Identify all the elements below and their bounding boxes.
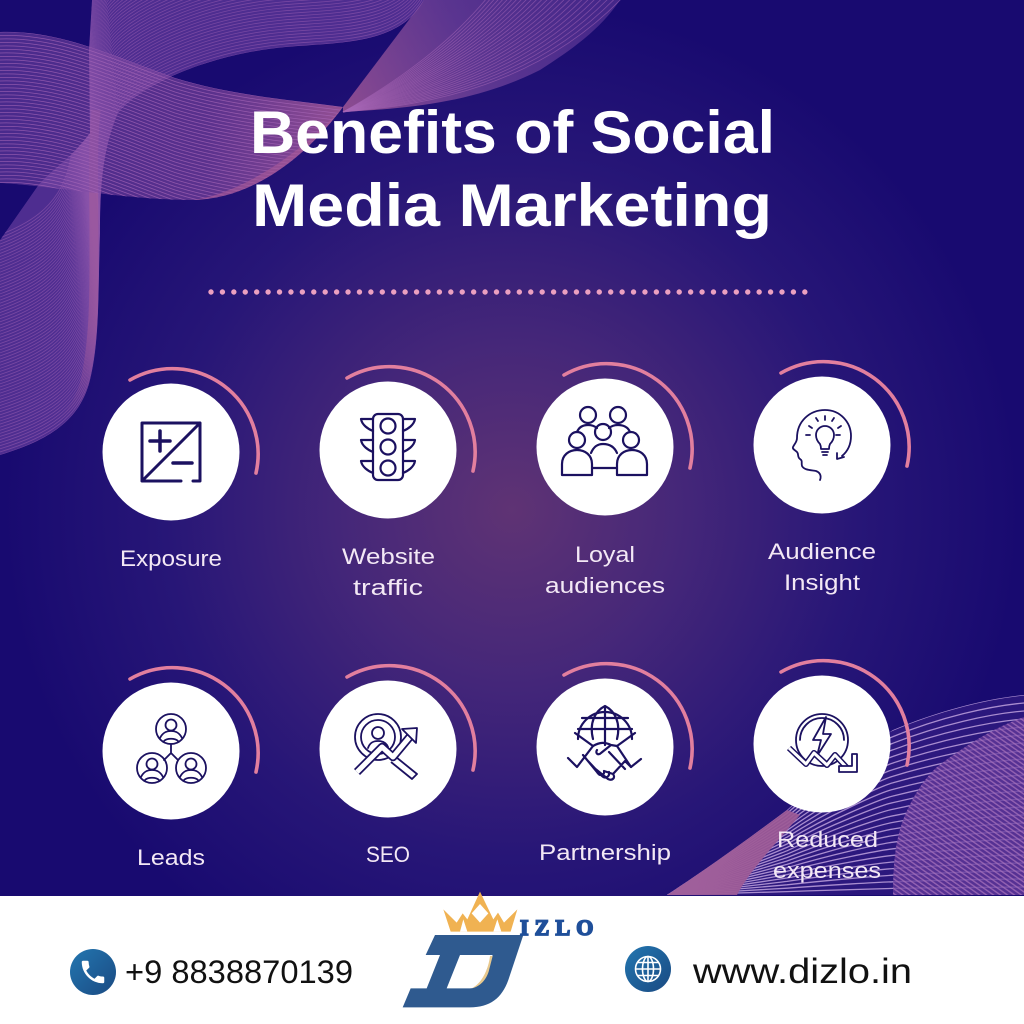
item: Website traffic: Website bbox=[342, 544, 435, 569]
icon: traffic light bbox=[361, 414, 415, 480]
phone contact bbox=[70, 949, 353, 995]
dotted divider bbox=[211, 289, 805, 295]
item: Leads bbox=[102, 668, 258, 870]
title bbox=[250, 99, 775, 239]
item: Leads: Leads bbox=[137, 845, 205, 870]
icon: target and arrow bbox=[355, 714, 417, 779]
item: Reduced expenses bbox=[754, 661, 909, 883]
item: Website traffic bbox=[320, 367, 475, 600]
footer panel bbox=[0, 892, 1024, 1024]
item: Partnership bbox=[536, 664, 692, 865]
item: Website traffic: traffic bbox=[353, 575, 423, 600]
icon: globe and handshake bbox=[568, 706, 641, 780]
icon: connected people bbox=[137, 714, 206, 783]
item: Loyal audiences bbox=[536, 364, 692, 598]
decorative wave ribbons: top left bbox=[0, 0, 625, 455]
item: Audience Insight: Insight bbox=[784, 570, 860, 595]
icon: exposure square bbox=[142, 423, 200, 481]
decorative wave ribbons: bottom right bbox=[667, 695, 1024, 895]
item: Loyal audiences: Loyal bbox=[575, 542, 635, 567]
item: SEO bbox=[320, 666, 475, 867]
item: Exposure bbox=[102, 369, 258, 571]
icon: lightning and falling arrow bbox=[789, 714, 857, 772]
icon: head with light bulb bbox=[793, 410, 851, 480]
logo bbox=[403, 892, 593, 1007]
item: Loyal audiences: audiences bbox=[545, 573, 665, 598]
item: SEO: SEO bbox=[366, 842, 410, 867]
website contact bbox=[625, 946, 912, 992]
phone contact: +9 8838870139 bbox=[125, 954, 353, 990]
icon: group of people bbox=[562, 407, 647, 475]
item: Audience Insight: Audience bbox=[768, 539, 876, 564]
logo: IZLO bbox=[520, 915, 593, 940]
item: Partnership: Partnership bbox=[539, 840, 671, 865]
item: Exposure: Exposure bbox=[120, 546, 222, 571]
item: Audience Insight bbox=[754, 362, 909, 595]
title: Benefits of Social bbox=[250, 99, 775, 166]
item: Reduced expenses: Reduced bbox=[777, 827, 878, 852]
item: Reduced expenses: expenses bbox=[773, 858, 881, 883]
website contact: www.dizlo.in bbox=[692, 952, 912, 991]
title: Media Marketing bbox=[252, 172, 772, 239]
